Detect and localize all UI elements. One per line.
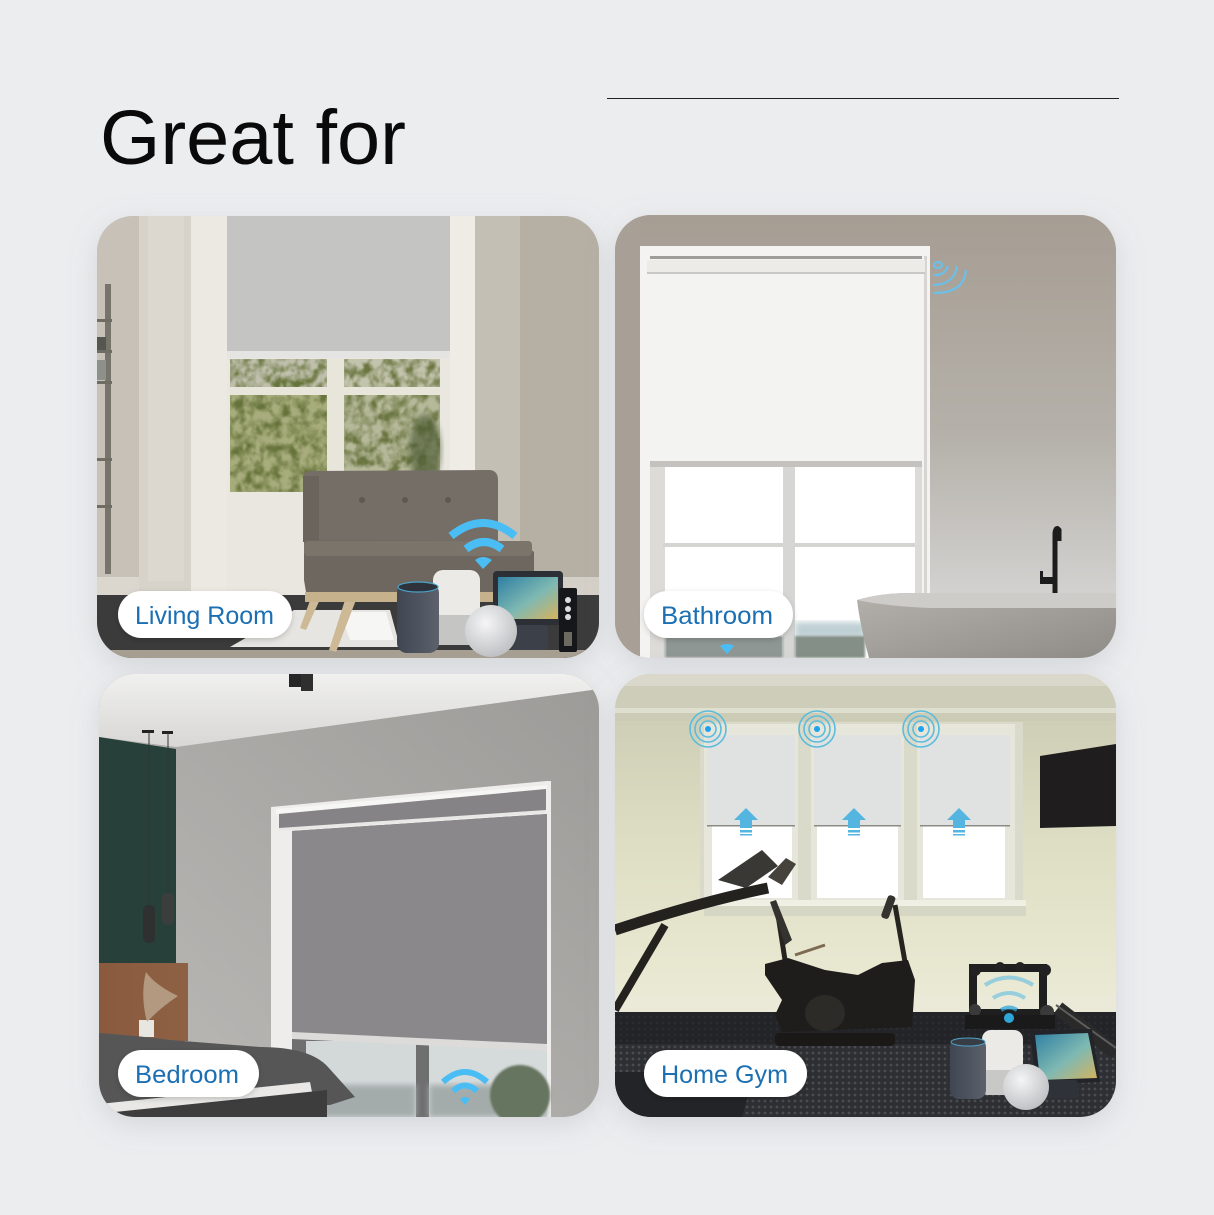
label: home gym: Home Gym xyxy=(661,1061,788,1089)
title: Great for xyxy=(100,95,406,181)
bench xyxy=(1058,1008,1116,1053)
TV xyxy=(1040,744,1116,828)
ceiling xyxy=(99,674,599,747)
faucet xyxy=(1040,529,1059,593)
sofa xyxy=(300,470,534,652)
green panel xyxy=(99,737,176,963)
icon: wifi xyxy=(443,1072,487,1105)
pendant lights xyxy=(142,730,174,943)
label: bedroom: Bedroom xyxy=(135,1061,239,1089)
treadmill xyxy=(615,850,796,1010)
spotlight xyxy=(289,674,313,691)
icon: signal arcs xyxy=(933,262,966,293)
icon: wifi xyxy=(451,523,515,569)
exercise bike xyxy=(765,894,915,1046)
smart devices xyxy=(950,1029,1100,1110)
label: bathroom xyxy=(644,591,793,638)
panes xyxy=(665,466,783,658)
sill xyxy=(700,900,1026,906)
headboard xyxy=(99,963,188,1041)
icon: wifi faded xyxy=(985,978,1033,1010)
ceiling molding xyxy=(615,674,1116,686)
dumbbell rack xyxy=(965,962,1055,1029)
window xyxy=(271,781,551,1125)
panel: bedroom xyxy=(99,674,599,1125)
shelf xyxy=(97,284,112,574)
panel: living room xyxy=(97,216,599,658)
panel: bathroom xyxy=(615,215,1116,666)
label: living room: Living Room xyxy=(135,602,274,630)
label: bathroom: Bathroom xyxy=(661,602,773,630)
baseboard and floor xyxy=(615,994,1116,1012)
signal circles xyxy=(690,711,939,747)
smart devices xyxy=(397,570,577,657)
blind xyxy=(650,273,922,463)
label: home gym xyxy=(644,1050,807,1097)
bed xyxy=(99,1033,355,1117)
blinds xyxy=(707,735,795,825)
doors xyxy=(139,216,191,596)
label: living room xyxy=(118,591,292,638)
window view xyxy=(230,359,441,492)
arrows xyxy=(734,808,971,836)
baseboard and floor xyxy=(97,577,139,595)
window frame xyxy=(640,246,930,666)
tub xyxy=(857,593,1116,658)
panel: home gym xyxy=(615,674,1116,1117)
blue dot xyxy=(720,644,734,654)
blind xyxy=(227,216,450,352)
window frames xyxy=(700,722,1023,902)
plant xyxy=(139,972,178,1037)
label: bedroom xyxy=(118,1050,259,1097)
